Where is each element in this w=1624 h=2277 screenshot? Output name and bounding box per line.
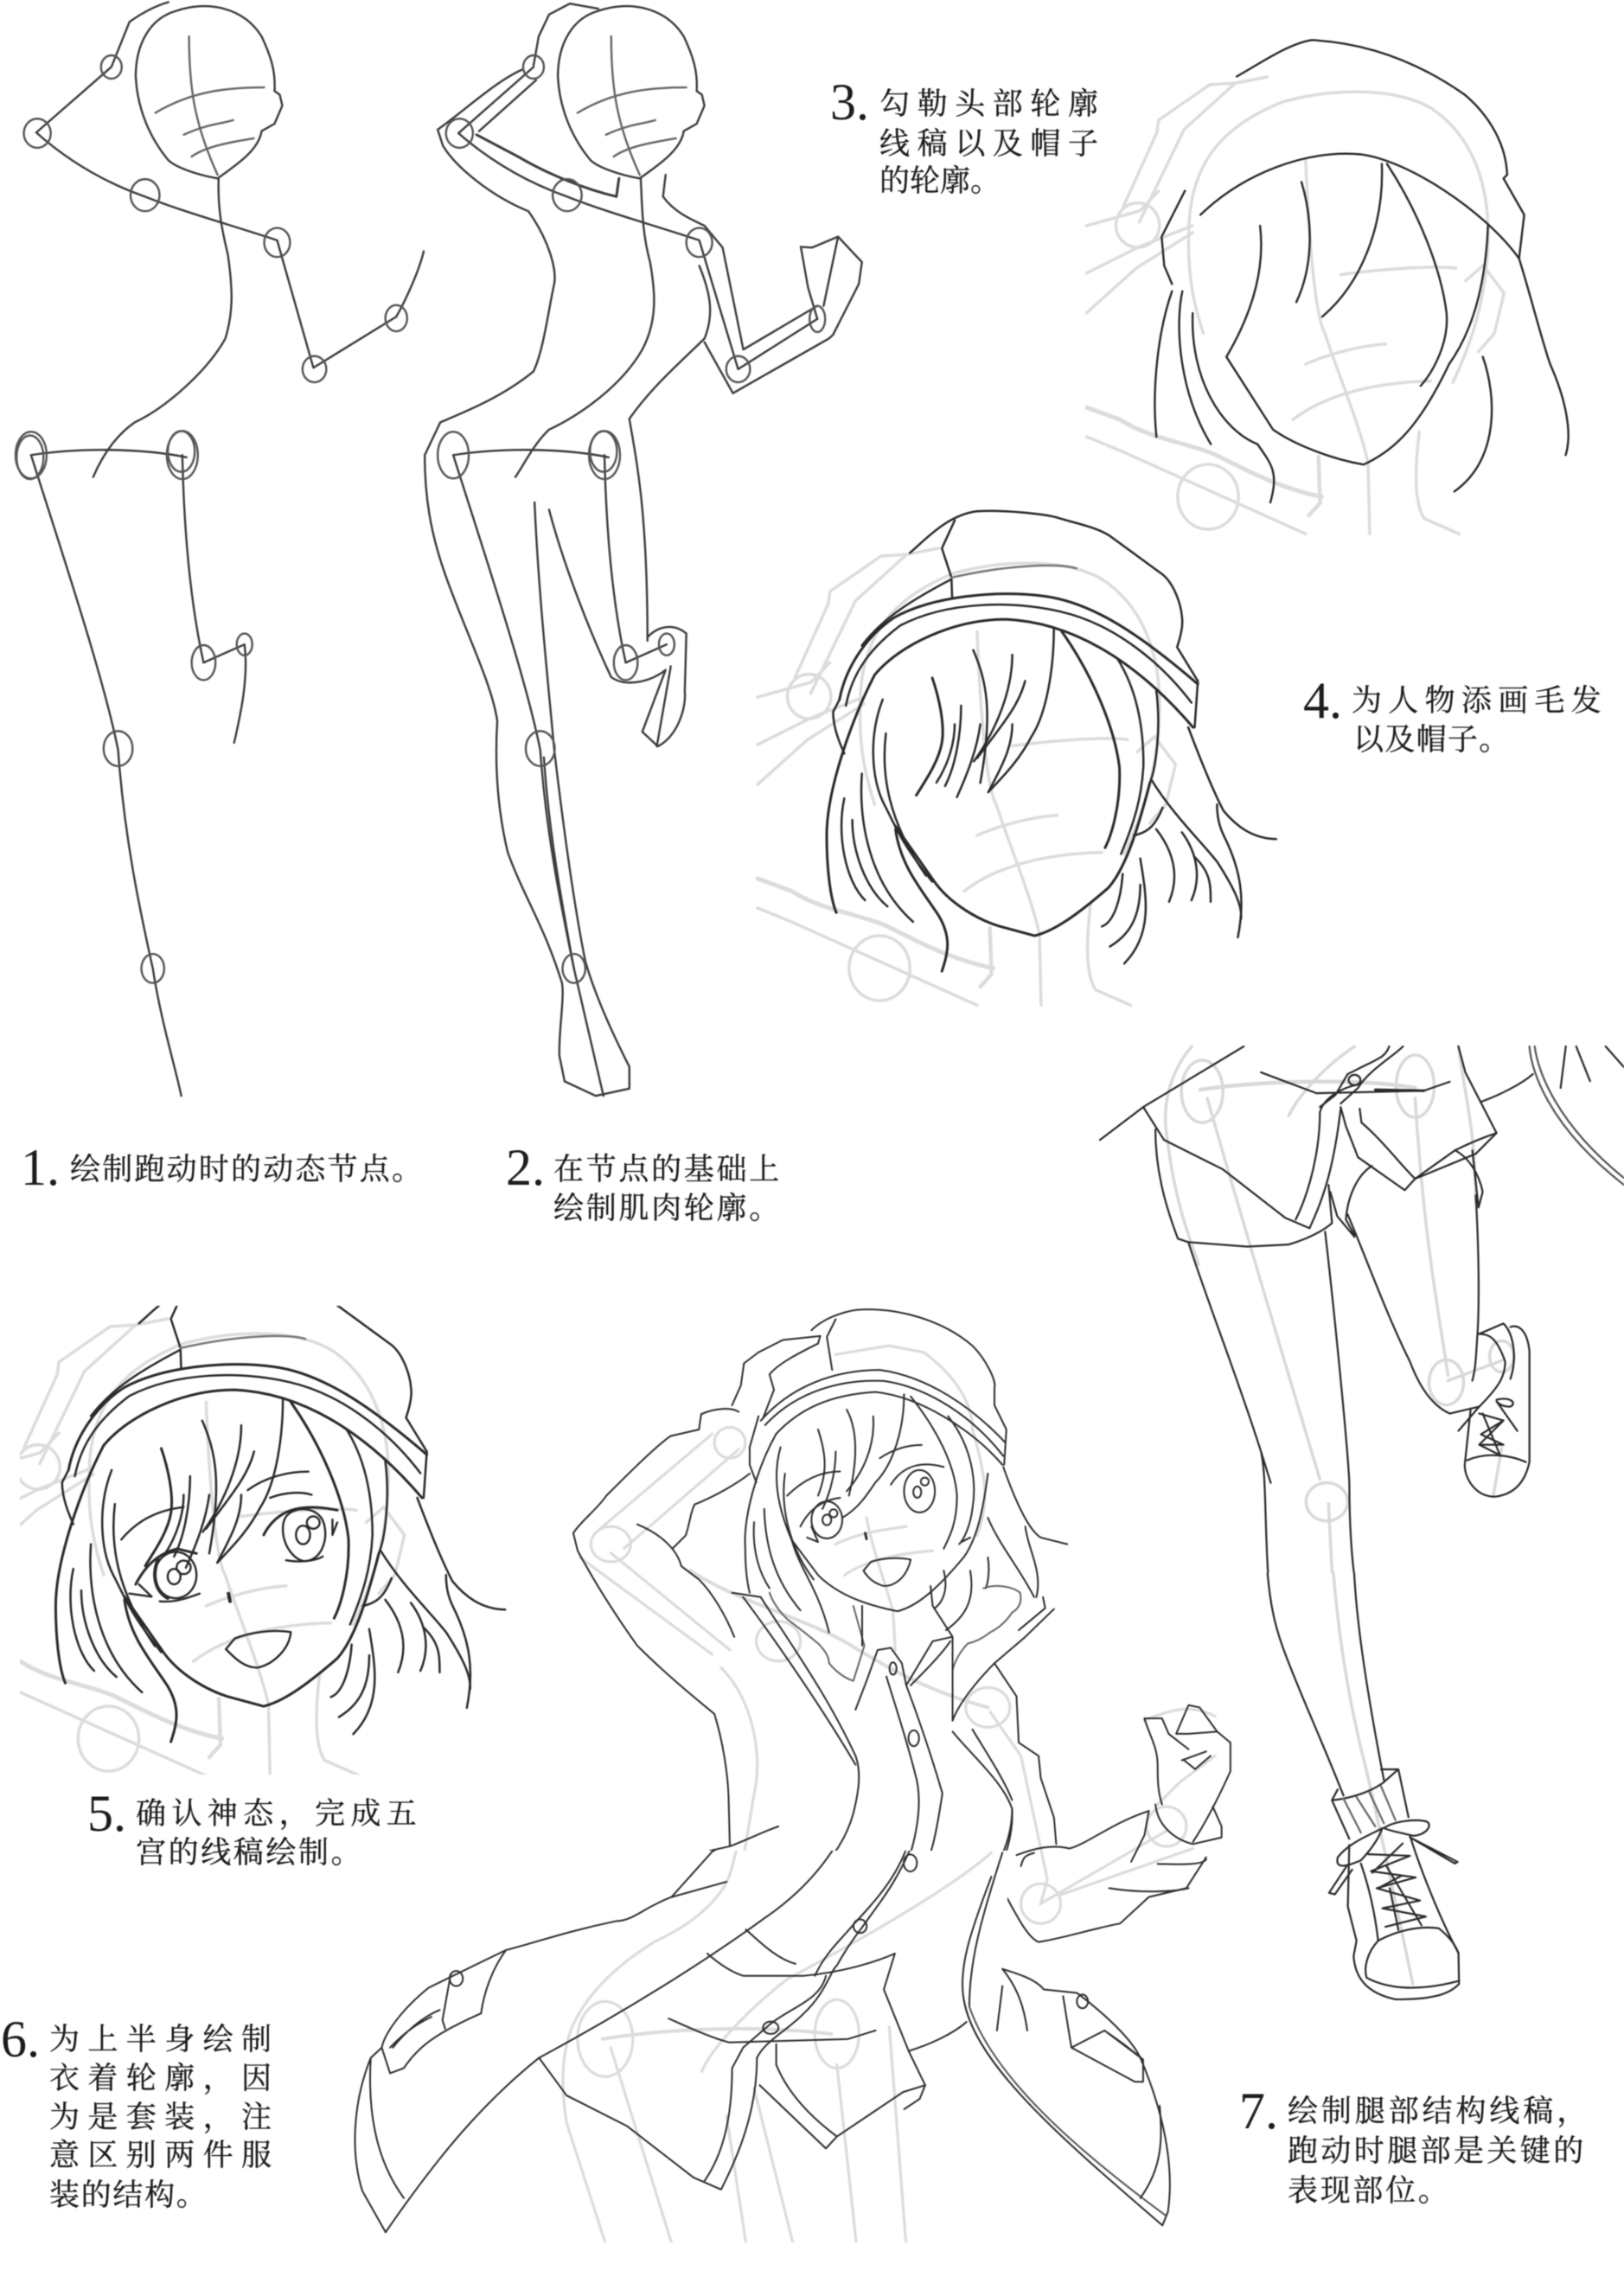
grey skeleton legs [1166,1046,1514,1572]
panel: step 2 muscle outline [425,3,862,1096]
caption: step 6: 衣着轮廓，因 [49,2062,279,2095]
caption: step 2: 绘制肌肉轮廓。 [553,1192,782,1225]
lower leg and boot [1268,1573,1459,1999]
caption: step 1: 绘制跑动时的动态节点。 [70,1153,424,1186]
caption: step 7: 7. [1239,2082,1278,2139]
joint nodes [16,55,407,983]
caption: step 7 [1239,2082,1590,2208]
head and hat outline [1154,40,1569,502]
caption: step 1 [21,1139,424,1196]
caption: step 6: 装的结构。 [49,2178,208,2212]
grey construction sketch [758,548,1175,1005]
arm and shoulder lines [31,3,424,1096]
panel: step 3 head outline and hat [1086,40,1569,534]
caption: step 7: 跑动时腿部是关键的 [1288,2134,1587,2168]
caption: step 4: 4. [1303,672,1342,729]
caption: step 3: 3. [830,74,869,131]
panel: step 7 legs line art [1100,1046,1624,1999]
caption: step 3: 的轮廓。 [879,164,1001,198]
caption: step 6: 为上半身绘制 [49,2023,279,2056]
grey skeleton lower [561,1851,993,2243]
right jacket tail [964,1969,1170,2225]
caption: step 6 [1,2011,279,2212]
caption: step 6: 意区别两件服 [49,2139,279,2172]
head guide [136,6,282,178]
caption: step 1: 1. [21,1139,60,1196]
grey skeleton upper [580,1346,1215,1989]
bones [453,67,817,1096]
caption: step 7: 绘制腿部结构线稿， [1288,2095,1590,2128]
hair and hat line art [55,1282,505,1742]
caption: step 5: 5. [87,1785,126,1842]
panel: step 5 facial features [0,1282,505,1775]
caption: step 3: 线稿以及帽子 [879,127,1106,161]
caption: step 6: 6. [1,2011,40,2068]
caption: step 3: 勾勒头部轮廓 [879,87,1106,121]
skirt and legs [1100,1046,1624,1572]
lower figure [353,1850,1007,2243]
panel: step 1 joint skeleton [16,3,424,1096]
caption: step 3 [830,74,1106,198]
hair and hat line art [827,511,1276,971]
caption: step 5: 宫的线稿绘制。 [136,1836,363,1870]
grey construction sketch [0,1319,405,1775]
legs upper: skirt, thighs, raised foot [1100,1046,1624,1572]
caption: step 2 [506,1139,782,1225]
caption: step 5: 确认神态，完成五 [136,1797,422,1831]
line art lower: jacket tails, shirt hem, pockets [353,1850,1007,2234]
line art upper: hat, head, jacket, arm, hand [553,1309,1231,1989]
head guide [558,6,705,178]
caption: step 4: 为人物添画毛发 [1352,684,1608,718]
caption: step 6: 为是套装，注 [49,2101,279,2134]
caption: step 7: 表现部位。 [1288,2174,1451,2208]
grey construction sketch [1086,77,1504,534]
caption: step 5 [87,1785,422,1870]
body outline [425,3,862,1096]
panel: step 6 upper body clothing [355,1309,1231,2242]
panel: step 4 hair and hat [758,511,1276,1005]
joint nodes [438,55,825,983]
face: eyes, nose and mouth [121,1472,337,1667]
caption: step 2: 2. [506,1139,545,1196]
upper figure [553,1309,1231,1989]
caption: step 4 [1303,672,1608,757]
caption: step 4: 以及帽子。 [1353,723,1511,757]
caption: step 2: 在节点的基础上 [553,1153,782,1186]
